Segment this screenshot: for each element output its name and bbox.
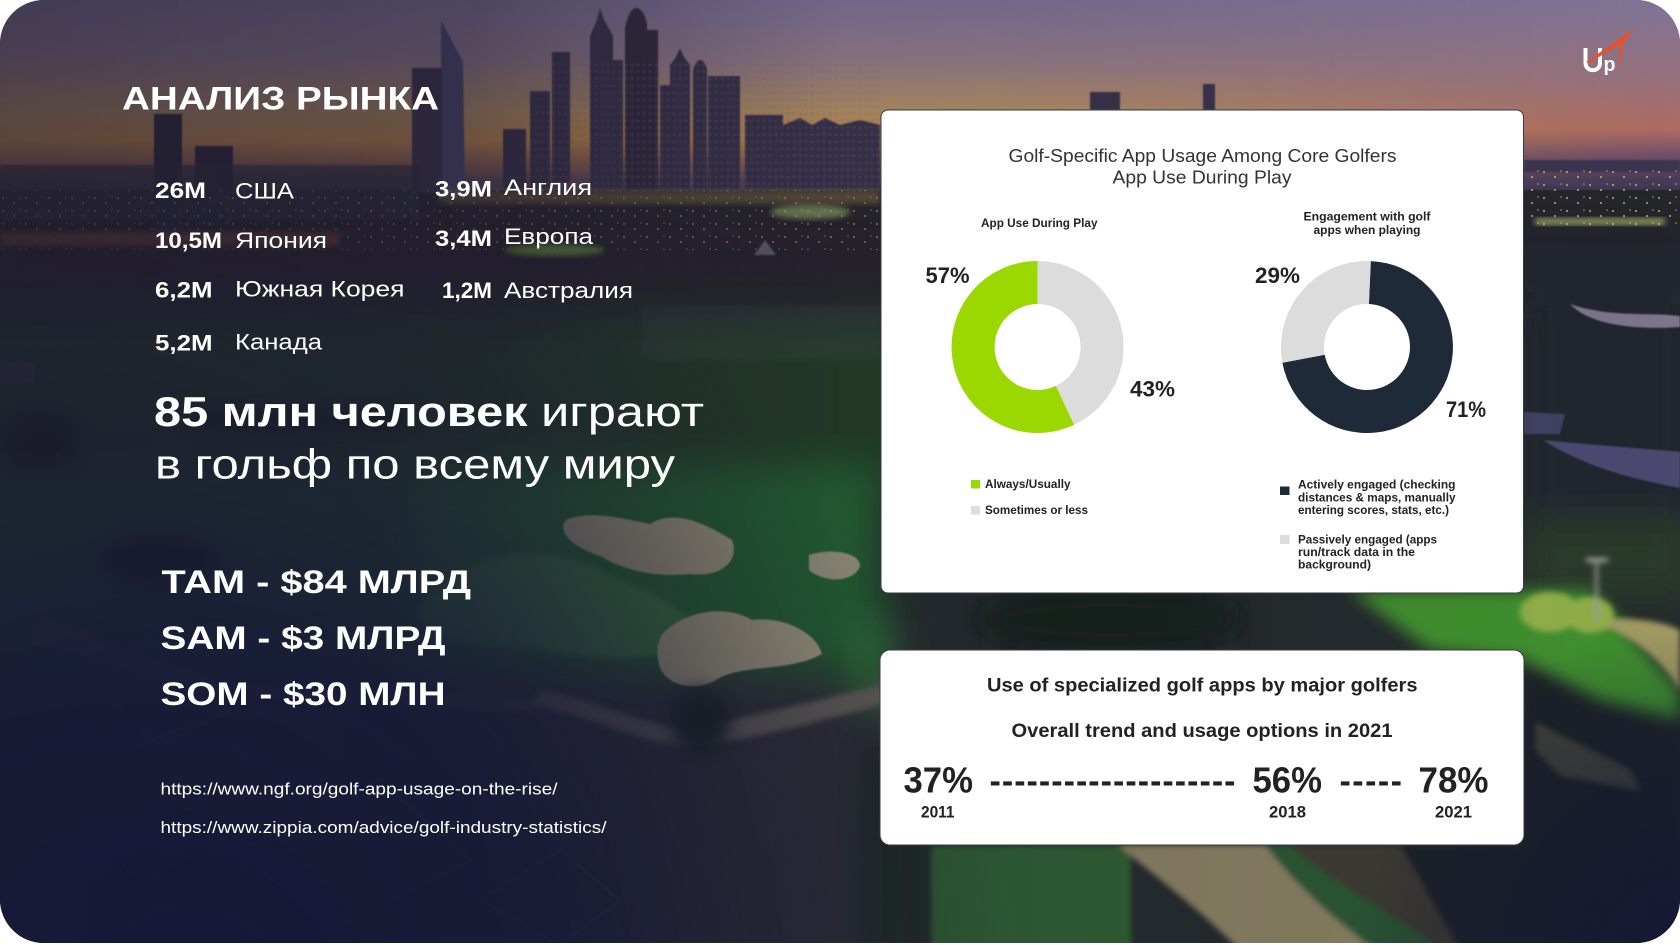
city lights bbox=[0, 170, 1677, 258]
stat: 2021: 2021 bbox=[1435, 802, 1472, 822]
country list: golfers by market: Австралия bbox=[504, 278, 633, 303]
left chart title: App Use During Play bbox=[981, 216, 1098, 230]
country list: golfers by market: Европа bbox=[504, 224, 594, 249]
country list: golfers by market: Англия bbox=[504, 175, 592, 200]
legend: right donut: run/track data in the bbox=[1298, 545, 1415, 559]
market size: TAM SAM SOM: SAM - $3 МЛРД bbox=[160, 620, 446, 656]
country list: golfers by market bbox=[155, 175, 633, 356]
stat: 2021 bbox=[1418, 760, 1488, 822]
dashed connector: -------------------- bbox=[990, 762, 1236, 800]
legend: right donut bbox=[1280, 478, 1456, 572]
legend: right donut: Passively engaged (apps bbox=[1298, 532, 1437, 546]
market size: TAM SAM SOM: ТАМ - $84 МЛРД bbox=[162, 564, 471, 600]
stat: 2018 bbox=[1252, 760, 1322, 822]
country list: golfers by market: 6,2М bbox=[155, 278, 212, 302]
source links: https://www.ngf.org/golf-app-usage-on-the-rise/ bbox=[160, 780, 558, 798]
country list: golfers by market: Япония bbox=[235, 228, 327, 253]
legend: right donut: background) bbox=[1298, 558, 1371, 572]
country list: golfers by market: Канада bbox=[235, 330, 323, 354]
legend: right donut: Actively engaged (checking bbox=[1298, 478, 1456, 492]
value: 57%: 57% bbox=[926, 263, 970, 288]
panel heading: App Use During Play bbox=[1112, 168, 1292, 188]
source links: https://www.zippia.com/advice/golf-industry-statistics/ bbox=[160, 818, 607, 837]
stat: 2018: 56% bbox=[1252, 760, 1322, 800]
headline: 85 million golfers: в гольф по всему миру bbox=[155, 440, 675, 488]
skyline bbox=[0, 8, 1680, 195]
water on the right and left bbox=[1524, 304, 1680, 488]
value: 43%: 43% bbox=[1130, 376, 1175, 402]
title: АНАЛИЗ РЫНКА bbox=[122, 80, 439, 116]
legend: left donut: Always/Usually bbox=[985, 477, 1071, 491]
country list: golfers by market: 26М bbox=[155, 178, 206, 203]
panel: usage trend bbox=[880, 650, 1524, 845]
country list: golfers by market: Южная Корея bbox=[235, 276, 404, 302]
headline: 85 million golfers bbox=[154, 388, 704, 488]
panel heading bbox=[1008, 146, 1396, 188]
fairways, bunkers and path bbox=[534, 514, 880, 744]
value: 29%: 29% bbox=[1255, 263, 1300, 288]
donut chart: app use during play bbox=[952, 261, 1124, 433]
country list: golfers by market: 3,4М bbox=[435, 226, 492, 251]
panel heading: Golf-Specific App Usage Among Core Golfers bbox=[1008, 146, 1396, 166]
trend heading: Use of specialized golf apps by major golfers bbox=[987, 676, 1418, 696]
legend: left donut bbox=[971, 477, 1088, 517]
right chart title bbox=[1304, 210, 1432, 237]
dark trees bbox=[666, 601, 1237, 752]
trend heading: Overall trend and usage options in 2021 bbox=[1012, 721, 1393, 742]
panel: app usage donuts bbox=[881, 110, 1524, 593]
country list: golfers by market: 5,2М bbox=[155, 330, 212, 356]
headline: 85 million golfers: играют bbox=[541, 388, 704, 435]
ground base layers bbox=[0, 205, 1680, 945]
dark overlays bbox=[0, 0, 1236, 943]
legend: right donut: entering scores, stats, etc.) bbox=[1298, 503, 1449, 517]
legend: right donut: distances & maps, manually bbox=[1298, 490, 1456, 504]
donut chart: engagement bbox=[1281, 261, 1453, 433]
stat: 2011 bbox=[904, 760, 973, 822]
source links bbox=[160, 780, 607, 837]
dashed connector: ----- bbox=[1340, 762, 1402, 800]
stat: 2011: 2011 bbox=[921, 802, 954, 822]
market size: TAM SAM SOM: SOM - $30 МЛН bbox=[160, 676, 446, 712]
sky gradient bbox=[0, 0, 1680, 190]
bottom right golf terrain bbox=[931, 558, 1680, 945]
trend heading bbox=[987, 676, 1418, 742]
value: 71%: 71% bbox=[1446, 397, 1486, 422]
stat: 2011: 37% bbox=[904, 760, 973, 800]
stat: 2018: 2018 bbox=[1269, 802, 1306, 822]
country list: golfers by market: 3,9М bbox=[435, 176, 492, 202]
stat: 2021: 78% bbox=[1418, 760, 1488, 800]
headline: 85 million golfers: 85 млн человек bbox=[154, 388, 529, 435]
country list: golfers by market: США bbox=[235, 178, 294, 204]
right chart title: Engagement with golf bbox=[1304, 210, 1432, 224]
market size: TAM SAM SOM bbox=[160, 564, 471, 712]
right chart title: apps when playing bbox=[1314, 223, 1420, 237]
country list: golfers by market: 10,5М bbox=[155, 228, 222, 253]
legend: left donut: Sometimes or less bbox=[985, 503, 1088, 517]
logo: Up bbox=[1586, 28, 1635, 76]
logo: Up: p bbox=[1604, 54, 1616, 76]
building outlines, bottom left bbox=[40, 670, 620, 945]
country list: golfers by market: 1,2М bbox=[442, 278, 492, 303]
